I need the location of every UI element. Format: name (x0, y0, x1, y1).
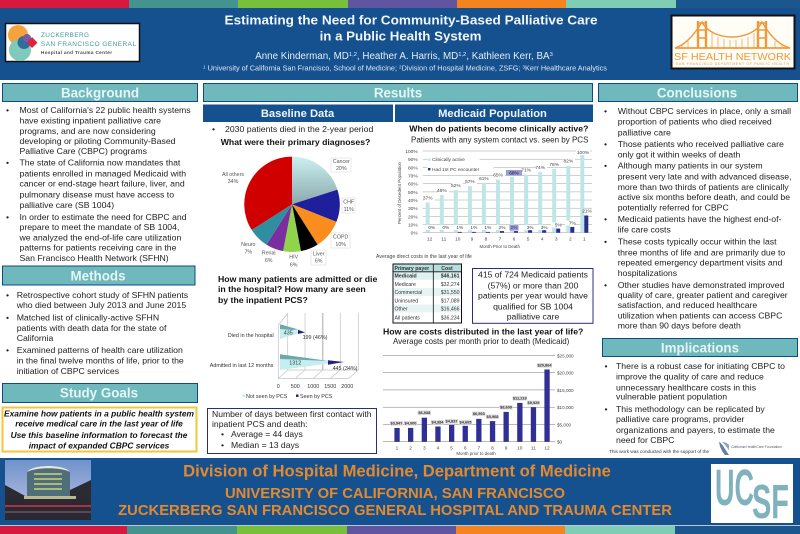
methods text: initiation of CBPC services (17, 366, 120, 376)
conclusions text: utilization when patients can access CBPC (618, 311, 782, 321)
background text: pulmonary disease must have access to (20, 189, 174, 199)
3D cone chart: hospital use: Not seen by PCS (246, 394, 288, 400)
acknowledgement: This work was conducted with the support of the (609, 449, 709, 454)
photo: hospital building (5, 460, 91, 520)
conclusions text: repeated emergency department visits and (618, 257, 783, 267)
implications text: There is a robust case for initiating CBPC to (616, 361, 785, 371)
background text: • (6, 158, 9, 168)
bar chart: clinically active by month: 100% (405, 149, 418, 155)
bar chart: monthly costs: $20,864 (537, 363, 552, 368)
header band (0, 0, 800, 80)
bar chart: clinically active by month: 3% (527, 225, 534, 231)
affiliations: 3 (522, 64, 525, 70)
implications text: vulnerable patient population (616, 392, 727, 402)
bar chart: monthly costs: $4,384 (432, 420, 444, 425)
bar chart: clinically active by month: 70% (408, 174, 418, 180)
heading: background (2, 84, 198, 102)
bar chart: monthly costs: $5,000 (557, 422, 571, 428)
methods text (6, 290, 189, 376)
bar chart: monthly costs: 10 (517, 446, 523, 452)
bar chart: clinically active by month: Month Prior to Death (479, 244, 521, 249)
bar chart: clinically active by month: 78% (549, 162, 560, 168)
logo: SF Health Network (672, 16, 794, 68)
callout: SB 1004: patients per year would have (478, 291, 588, 301)
heading: background: Background (61, 86, 139, 100)
question: cost distribution: How are costs distributed in the last year of life? (383, 327, 583, 337)
bar chart: clinically active by month: 9 (471, 236, 474, 242)
bar chart: clinically active by month: 4 (541, 236, 544, 242)
table: costs by payer: Cost (441, 266, 453, 272)
background text: The state of California now mandates that (20, 158, 181, 168)
bar chart: monthly costs: $4,837 (446, 419, 457, 424)
logo: UCSF: UC (715, 459, 754, 516)
methods text: Matched list of clinically-active SFHN (17, 312, 159, 322)
bar chart: monthly costs: 12 (544, 446, 550, 452)
conclusions text: more than 90 days before death (618, 321, 741, 331)
pie chart: primary diagnoses: CHF (343, 200, 355, 206)
bar chart: clinically active by month: 0% (442, 225, 450, 231)
study goals callout (2, 408, 196, 452)
table: costs by payer: $36,234 (441, 316, 460, 322)
bar chart: monthly costs: 1 (396, 446, 399, 452)
footer band (0, 458, 800, 534)
conclusions text: • (604, 280, 607, 290)
bar chart: clinically active by month: 40% (408, 198, 418, 204)
bar chart: monthly costs: $15,000 (557, 388, 574, 393)
bar chart: clinically active by month: 1% (470, 225, 478, 231)
background text: have existing inpatient palliative care (20, 115, 161, 125)
logo: Zuckerberg San Francisco General: SAN FRANCISCO GENERAL (41, 41, 136, 48)
conclusions text: • (604, 161, 607, 171)
table: costs by payer: $46,161 (441, 273, 460, 279)
bar chart: clinically active by month: Clinically active (432, 157, 465, 163)
bar chart: clinically active by month: 60% (408, 182, 418, 188)
bar chart: clinically active by month: 2% (499, 225, 506, 231)
bar chart: monthly costs: 4 (437, 446, 440, 452)
bar chart: clinically active by month: 2% (511, 225, 518, 231)
conclusions text: • (604, 139, 607, 149)
title line 2: in a Public Health System (320, 28, 481, 44)
heading: methods: Methods (70, 268, 126, 284)
bar chart: monthly costs: 8 (491, 446, 494, 452)
panel: methods (2, 266, 195, 376)
footer: division: Division of Hospital Medicine, Department of Medicine (183, 462, 611, 480)
bar chart: monthly costs: $10,000 (557, 405, 574, 410)
bar chart: clinically active by month: Percent of Decedent Population (397, 161, 402, 224)
table: costs by payer: Uninsured (394, 298, 418, 304)
bar chart: clinically active by month: 3% (541, 225, 548, 231)
background text: palliative care (SB 1004) (20, 200, 114, 210)
bar chart: clinically active by month: 2 (569, 236, 572, 242)
background text: In order to estimate the need for CBPC and (20, 212, 187, 222)
callout: days to death: Number of days between first contact with (212, 409, 372, 419)
study goals callout: Examine how patients in a public health system (4, 408, 194, 418)
bar chart: clinically active by month: 50% (408, 190, 418, 196)
background text: we analyzed the end-of-life care utilization (18, 232, 181, 242)
pie chart: primary diagnoses: 34% (228, 179, 239, 185)
conclusions text: active six months before death, and could be (618, 192, 790, 202)
question: diagnoses: What were their primary diagnoses? (221, 137, 370, 147)
table: costs by payer: Primary payer (394, 266, 429, 272)
bar chart: clinically active by month: 57% (465, 179, 475, 185)
conclusions text: proportion of patients who died received (618, 117, 772, 127)
conclusions text (604, 106, 792, 331)
conclusions text: Medicaid patients have the highest end-of- (618, 214, 782, 224)
callout: SB 1004: palliative care (507, 312, 559, 322)
bar chart: clinically active by month: 1% (484, 225, 492, 231)
bar chart: clinically active by month: 37% (423, 196, 433, 202)
logo: SF Health Network: SF HEALTH NETWORK (674, 51, 791, 63)
study goals callout: Use this baseline information to forecast the (11, 430, 188, 440)
heading: implications: Implications (661, 340, 739, 356)
bar chart: monthly costs: 3 (423, 446, 426, 452)
bar chart: monthly costs: $4,000 (405, 421, 416, 426)
pie chart: primary diagnoses: 6% (315, 259, 323, 265)
background text: Palliative Care (CBPC) programs (20, 146, 148, 156)
callout: SB 1004: qualified for SB 1004 (493, 301, 573, 311)
bar chart: clinically active by month: 68% (509, 170, 520, 176)
implications text: • (604, 404, 608, 414)
table: costs by payer (393, 264, 462, 323)
bar chart: monthly costs: $4,605 (460, 420, 472, 425)
conclusions text: more than two thirds of patients are clinically (618, 182, 789, 192)
implications text: palliative care programs, provider (616, 414, 745, 424)
bar chart: clinically active by month: 61% (479, 176, 489, 182)
question: admissions: by the inpatient PCS? (218, 295, 308, 305)
conclusions text: Those patients who received palliative care (618, 139, 784, 149)
bar chart: clinically active by month (397, 149, 593, 249)
implications text: This methodology can be replicated by (616, 404, 765, 414)
question: admissions: in the hospital? How many are seen (218, 284, 366, 294)
question: clinically active: When do patients become clinically active? (409, 123, 588, 133)
bar chart: clinically active by month: 52% (451, 183, 461, 189)
table: costs by payer: Medicaid (394, 273, 417, 279)
implications text: • (604, 361, 608, 371)
background text: San Francisco Health Network (SFHN) (20, 253, 169, 263)
authors: , Heather A. Harris, MD (357, 51, 458, 62)
bar chart: monthly costs (383, 353, 574, 456)
conclusions text: hospitalizations (618, 268, 678, 278)
conclusions text: quality of care, greater patient and caregiver (618, 290, 788, 300)
bar chart: clinically active by month: 0% (428, 225, 436, 231)
bar chart: clinically active by month: Had 1st PC encounter (432, 167, 480, 173)
bar chart: monthly costs: $11,219 (513, 396, 528, 401)
callout: days to death: Median = 13 days (231, 440, 299, 450)
implications text: need for CBPC (616, 435, 674, 445)
3D cone chart: hospital use: 1000 (307, 384, 319, 390)
bar chart: monthly costs: $6,938 (418, 410, 431, 415)
authors: 3 (550, 52, 553, 58)
subtitle: cost distribution: Average costs per month prior to death (Medicaid) (393, 337, 570, 346)
bar chart: monthly costs: $5,968 (487, 414, 499, 419)
affiliations: 2 (399, 64, 402, 70)
bar chart: monthly costs: $3,947 (391, 421, 402, 426)
table: costs by payer: $32,274 (441, 282, 460, 288)
authors: 1,2 (349, 52, 357, 58)
baseline statement: 2030 patients died in the 2-year period (225, 124, 373, 134)
bar chart: monthly costs: $9,929 (528, 400, 540, 405)
conclusions text: present very late and with advanced disease, (618, 171, 792, 181)
heading: study goals: Study Goals (60, 386, 138, 400)
methods text: California (17, 333, 54, 343)
background text: Most of California's 22 public health systems (20, 105, 191, 115)
footer: hospital: ZUCKERBERG SAN FRANCISCO GENERAL HOSPITAL AND TRAUMA CENTER (118, 503, 672, 519)
pie chart: primary diagnoses: 6% (265, 258, 273, 264)
background text: patients enrolled in managed Medicaid with (20, 168, 186, 178)
callout: days to death: • (221, 429, 224, 439)
bar chart: monthly costs: 7 (477, 446, 480, 452)
bar chart: monthly costs: 2 (409, 446, 412, 452)
methods text: • (6, 312, 9, 322)
conclusions text: • (604, 106, 607, 116)
panel: baseline data (203, 104, 393, 454)
subtitle: clinically active: Patients with any system contact vs. seen by PCS (411, 136, 588, 145)
heading: conclusions (598, 84, 798, 102)
3D cone chart: hospital use: 1312 (289, 361, 301, 367)
affiliations: University of California San Francisco, School of Medicine; (206, 64, 399, 72)
bar chart: clinically active by month: 5 (527, 236, 530, 242)
authors: , Kathleen Kerr, BA (466, 51, 550, 62)
bar chart: clinically active by month: 46% (437, 188, 447, 194)
panel: implications (602, 338, 798, 455)
conclusions text: • (604, 214, 607, 224)
study goals callout: receive medical care in the last year of life (15, 418, 183, 428)
bar chart: clinically active by month: 20% (408, 214, 418, 220)
callout: days to death: Average = 44 days (231, 429, 303, 439)
implications text: unnecessary healthcare costs in this (616, 382, 757, 392)
background text: • (6, 105, 9, 115)
implications text (604, 361, 785, 445)
bar chart: clinically active by month: 11 (441, 236, 447, 242)
3D cone chart: hospital use: 199 (46%) (303, 335, 328, 341)
conclusions text: These costs typically occur within the last (618, 237, 777, 247)
conclusions text: Although many patients in our system (618, 161, 763, 171)
pie chart: primary diagnoses (222, 157, 355, 269)
pie chart: primary diagnoses: 20% (336, 166, 347, 172)
pie chart: primary diagnoses: Cancer (333, 159, 350, 165)
affiliations: Division of Hospital Medicine, ZSFG; (402, 64, 522, 72)
logo: Zuckerberg San Francisco General: ZUCKERBERG (41, 32, 89, 39)
pie chart: primary diagnoses: 7% (244, 250, 252, 256)
bar chart: clinically active by month: 6 (513, 236, 516, 242)
bar chart: clinically active by month: 10 (455, 236, 461, 242)
heading: methods (2, 266, 195, 285)
table caption: Average direct costs in the last year of life (376, 254, 472, 260)
conclusions text: • (604, 237, 607, 247)
bar chart: clinically active by month: 82% (563, 159, 574, 165)
background text: patterns for patients receiving care in the (20, 243, 177, 253)
3D cone chart: hospital use: Admitted in last 12 months (210, 363, 274, 369)
bar chart: monthly costs: 5 (450, 446, 453, 452)
bar chart: clinically active by month: 71% (521, 168, 532, 174)
heading: results: Results (374, 86, 422, 100)
bar chart: clinically active by month: 5% (555, 222, 562, 228)
table: costs by payer: Other (394, 307, 408, 313)
baseline statement: • (212, 124, 215, 134)
bar chart: monthly costs: $6,593 (473, 411, 486, 416)
3D cone chart: hospital use: 500 (291, 384, 300, 390)
background text: cancer or end-stage heart failure, liver, and (20, 179, 185, 189)
table: costs by payer: $31,550 (441, 290, 460, 296)
methods text: Examined patterns of health care utilization (17, 345, 183, 355)
3D cone chart: hospital use: 0 (277, 384, 280, 390)
heading: baseline data: Baseline Data (261, 108, 335, 120)
conclusions text: Other studies have demonstrated improved (618, 280, 784, 290)
question: admissions: How many patients are admitted or die (218, 274, 377, 284)
logo: Zuckerberg San Francisco General (6, 24, 140, 62)
table: costs by payer: All patients (394, 316, 420, 322)
background text: developing or piloting Community-Based (20, 136, 176, 146)
bar chart: clinically active by month: 80% (408, 165, 418, 171)
table: costs by payer: $16,466 (441, 307, 460, 313)
pie chart: primary diagnoses: Neuro (241, 242, 256, 248)
3D cone chart: hospital use (210, 313, 358, 400)
authors: Anne Kinderman, MD (255, 51, 349, 62)
methods text: patients with death data for the state of (17, 323, 167, 333)
conclusions text: Without CBPC services in place, only a small (618, 106, 791, 116)
panel: conclusions (598, 84, 798, 331)
bar chart: clinically active by month: 1 (583, 236, 586, 242)
background text: prepare to meet the mandate of SB 1004, (20, 222, 179, 232)
pie chart: primary diagnoses: 10% (335, 242, 346, 248)
heading: baseline data (203, 104, 393, 122)
conclusions text: palliative care (618, 127, 671, 137)
callout: SB 1004: 415 of 724 Medicaid patients (478, 269, 588, 279)
bar chart: clinically active by month: 7% (569, 220, 576, 226)
background text (6, 105, 191, 263)
bar chart: monthly costs: $20,000 (557, 371, 574, 376)
conclusions text: potentially referred for CBPC (618, 203, 729, 213)
bar chart: clinically active by month: 1% (456, 225, 464, 231)
pie chart: primary diagnoses: Renal (262, 251, 276, 257)
3D cone chart: hospital use: 2000 (341, 384, 353, 390)
background text: programs, and are now considering (20, 126, 156, 136)
panel: background (2, 84, 198, 263)
affiliations: Kerr Healthcare Analytics (525, 64, 607, 72)
bar chart: monthly costs: 11 (531, 446, 536, 452)
logo: Zuckerberg San Francisco General: Hospital and Trauma Center (41, 50, 112, 55)
bar chart: clinically active by month: 8 (485, 236, 488, 242)
bar chart: monthly costs: 9 (505, 446, 508, 452)
heading: implications (602, 338, 798, 356)
table: costs by payer: Medicare (394, 282, 416, 288)
callout: days to death (208, 408, 376, 454)
methods text: in the final twelve months of life, prior to the (17, 355, 184, 365)
3D cone chart: hospital use: Died in the hospital (228, 333, 274, 339)
question: admissions (218, 274, 377, 305)
callout: days to death: inpatient PCS and death: (212, 419, 308, 429)
bar chart: clinically active by month: 12 (427, 236, 433, 242)
heading: conclusions: Conclusions (657, 86, 737, 100)
bar chart: monthly costs: Month prior to death (456, 451, 496, 456)
table: costs by payer: Commercial (394, 290, 422, 296)
logo: California Healthcare Foundation: California HealthCare Foundation (731, 445, 782, 449)
table: costs by payer: $17,089 (441, 298, 460, 304)
bar chart: clinically active by month: 100% (577, 150, 590, 156)
bar chart: clinically active by month: 74% (535, 165, 546, 171)
implications text: organizations and payers, to estimate the (616, 425, 775, 435)
heading: study goals (2, 384, 198, 402)
bar chart: clinically active by month: 30% (408, 206, 418, 212)
pie chart: primary diagnoses: All others (222, 172, 244, 178)
conclusions text: only got it within weeks of death (618, 149, 741, 159)
footer: university: UNIVERSITY OF CALIFORNIA, SAN FRANCISCO (225, 486, 565, 502)
bar chart: clinically active by month: 0% (411, 231, 418, 237)
callout: SB 1004 (472, 268, 593, 323)
callout: days to death: • (221, 440, 224, 450)
3D cone chart: hospital use: 1500 (324, 384, 336, 390)
3D cone chart: hospital use: 435 (284, 331, 293, 337)
panel: medicaid population (376, 104, 593, 456)
bar chart: monthly costs: 6 (464, 446, 467, 452)
heading: medicaid population (395, 104, 593, 122)
study goals callout: impact of expanded CBPC services (29, 440, 170, 450)
heading: results (204, 84, 592, 102)
bar chart: clinically active by month: 7 (499, 236, 502, 242)
pie chart: primary diagnoses: HIV (289, 255, 299, 261)
bar chart: clinically active by month: 21% (582, 208, 593, 214)
pie chart: primary diagnoses: COPD (333, 235, 349, 241)
conclusions text: satisfaction, and reduced healthcare (618, 300, 757, 310)
affiliations: 1 (203, 64, 206, 70)
authors: 1,2 (458, 52, 466, 58)
bar chart: clinically active by month: 65% (493, 173, 504, 179)
pie chart: primary diagnoses: Liver (313, 252, 325, 258)
panel: study goals (2, 384, 198, 452)
callout: SB 1004: (57%) or more than 200 (488, 280, 579, 290)
methods text: Retrospective cohort study of SFHN patients (17, 290, 189, 300)
bar chart: clinically active by month: 10% (408, 222, 418, 228)
bar chart: monthly costs: $0 (557, 440, 563, 445)
conclusions text: life care costs (618, 225, 671, 235)
implications text: improve the quality of care and reduce (616, 372, 764, 382)
logo: SF Health Network: SAN FRANCISCO DEPARTMENT OF PUBLIC HEALTH (676, 62, 790, 66)
methods text: • (6, 345, 9, 355)
bar chart: clinically active by month: 3 (555, 236, 558, 242)
3D cone chart: hospital use: Seen by PCS (300, 394, 333, 400)
background text: • (6, 212, 9, 222)
bar chart: monthly costs: $25,000 (557, 353, 574, 358)
bar chart: monthly costs: $8,609 (500, 405, 513, 410)
3D cone chart: hospital use: 445 (34%) (333, 366, 358, 372)
pie chart: primary diagnoses: 6% (290, 263, 298, 269)
methods text: • (6, 290, 9, 300)
methods text: who died between July 2013 and June 2015 (16, 300, 186, 310)
bar chart: clinically active by month: 90% (408, 157, 418, 163)
conclusions text: three months of life and are primarily due to (618, 247, 785, 257)
title: Estimating the Need for Community-Based Palliative Care (224, 12, 598, 28)
logo: California Healthcare Foundation (719, 442, 782, 455)
heading: medicaid population: Medicaid Population (438, 108, 547, 120)
pie chart: primary diagnoses: 11% (344, 207, 354, 213)
